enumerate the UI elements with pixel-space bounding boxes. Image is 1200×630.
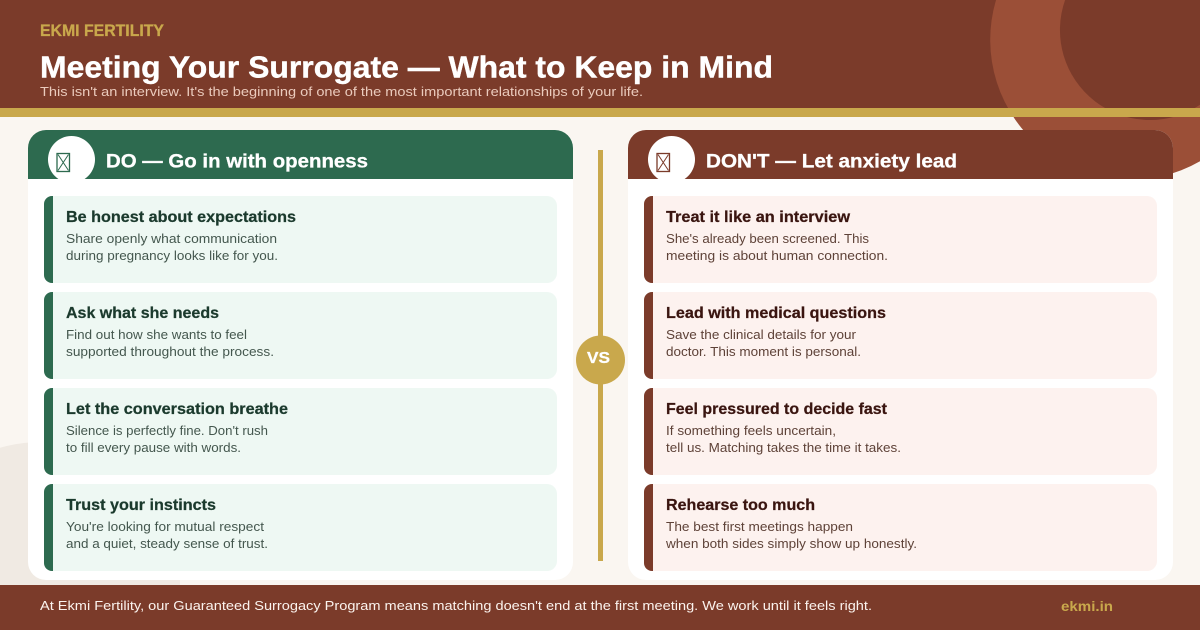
do card 3: Silence is perfectly fine. Don't rush [66, 424, 268, 438]
do card 4: Trust your instincts [66, 497, 216, 514]
don't card 1: meeting is about human connection. [666, 249, 888, 263]
vs divider [576, 150, 625, 561]
brand name: EKMI FERTILITY [40, 21, 165, 40]
title: Meeting Your Surrogate — What to Keep in Mind [40, 50, 773, 84]
do card 3: to fill every pause with words. [66, 441, 241, 455]
icon: don't badge [648, 136, 695, 179]
don't panel header [628, 130, 1173, 179]
vs divider: VS [587, 350, 610, 367]
do card 3: Let the conversation breathe [66, 401, 288, 418]
don't card 1 [644, 196, 1157, 283]
footer url: ekmi.in [1061, 598, 1113, 614]
don't card 2: Save the clinical details for your [666, 328, 856, 342]
don't card 2: Lead with medical questions [666, 305, 886, 322]
do panel header [28, 130, 573, 179]
do card 2: supported throughout the process. [66, 345, 274, 359]
panel: do [28, 130, 573, 580]
do card 1: Be honest about expectations [66, 209, 296, 226]
don't card 1: Treat it like an interview [666, 209, 851, 226]
don't card 3: tell us. Matching takes the time it takes. [666, 441, 901, 455]
do card 2: Ask what she needs [66, 305, 219, 322]
decorative circle bottom left [0, 442, 180, 585]
do card 3 [44, 388, 557, 475]
don't card 3 [644, 388, 1157, 475]
do card 1 [44, 196, 557, 283]
don't card 1: She's already been screened. This [666, 232, 869, 246]
do card 4 [44, 484, 557, 571]
do card 2 [44, 292, 557, 379]
don't card 3: If something feels uncertain, [666, 424, 836, 438]
do card 2: Find out how she wants to feel [66, 328, 247, 342]
don't card 4: when both sides simply show up honestly. [665, 537, 917, 551]
don't panel heading: DON'T — Let anxiety lead [706, 150, 957, 172]
footer [0, 585, 1200, 630]
gold header rule [0, 108, 1200, 117]
don't card 4: Rehearse too much [666, 497, 815, 514]
panel: don't [628, 130, 1173, 580]
do card 4: and a quiet, steady sense of trust. [66, 537, 268, 551]
decorative circles top right [990, 0, 1200, 180]
don't card 3: Feel pressured to decide fast [666, 401, 888, 418]
do card 1: during pregnancy looks like for you. [66, 249, 278, 263]
don't card 4 [644, 484, 1157, 571]
don't card 2: doctor. This moment is personal. [666, 345, 861, 359]
icon: do badge [48, 136, 95, 179]
subtitle: This isn't an interview. It's the beginning of one of the most important relationships of your life. [40, 84, 643, 99]
don't card 4: The best first meetings happen [666, 520, 853, 534]
footer message: At Ekmi Fertility, our Guaranteed Surrogacy Program means matching doesn't end at the first meeting. We work until it feels right. [40, 598, 872, 613]
do card 4: You're looking for mutual respect [66, 520, 265, 534]
don't card 2 [644, 292, 1157, 379]
do panel heading: DO — Go in with openness [106, 150, 368, 172]
header band [0, 0, 1200, 110]
do card 1: Share openly what communication [66, 232, 277, 246]
